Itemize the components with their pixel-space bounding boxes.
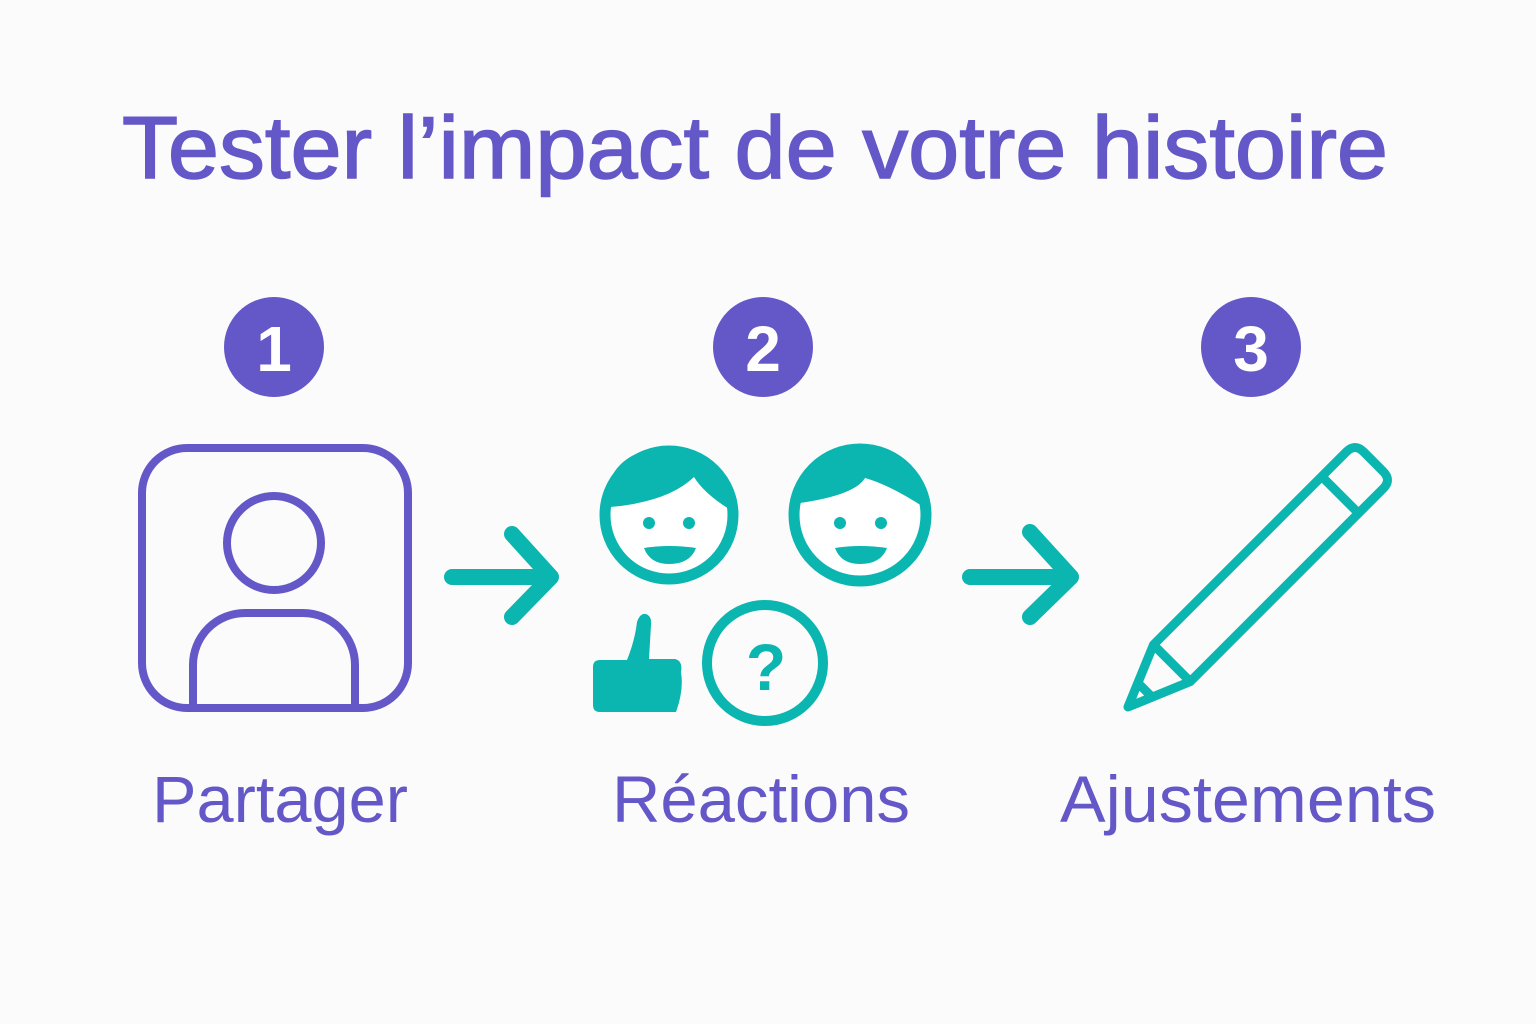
question circle: ? [746, 630, 786, 704]
question circle [707, 605, 823, 721]
icon: pencil [1110, 443, 1392, 725]
title: Tester l’impact de votre histoire [122, 98, 1388, 197]
step 2 badge [713, 297, 813, 397]
step 1 badge: 1 [256, 313, 292, 385]
face right [794, 446, 926, 581]
step 3 badge: 3 [1233, 313, 1269, 385]
label: Partager: Partager [152, 762, 408, 836]
thumbs up [593, 614, 682, 712]
arrow 2 [970, 532, 1071, 617]
step 3 badge [1201, 297, 1301, 397]
icon: profile [142, 448, 408, 708]
arrow 1 [452, 534, 551, 617]
icon: reactions [593, 446, 926, 721]
face left [605, 447, 734, 579]
label: Ajustements: Ajustements [1060, 762, 1436, 836]
step 2 badge: 2 [745, 313, 781, 385]
step 1 badge [224, 297, 324, 397]
label: Réactions: Réactions [612, 762, 910, 836]
